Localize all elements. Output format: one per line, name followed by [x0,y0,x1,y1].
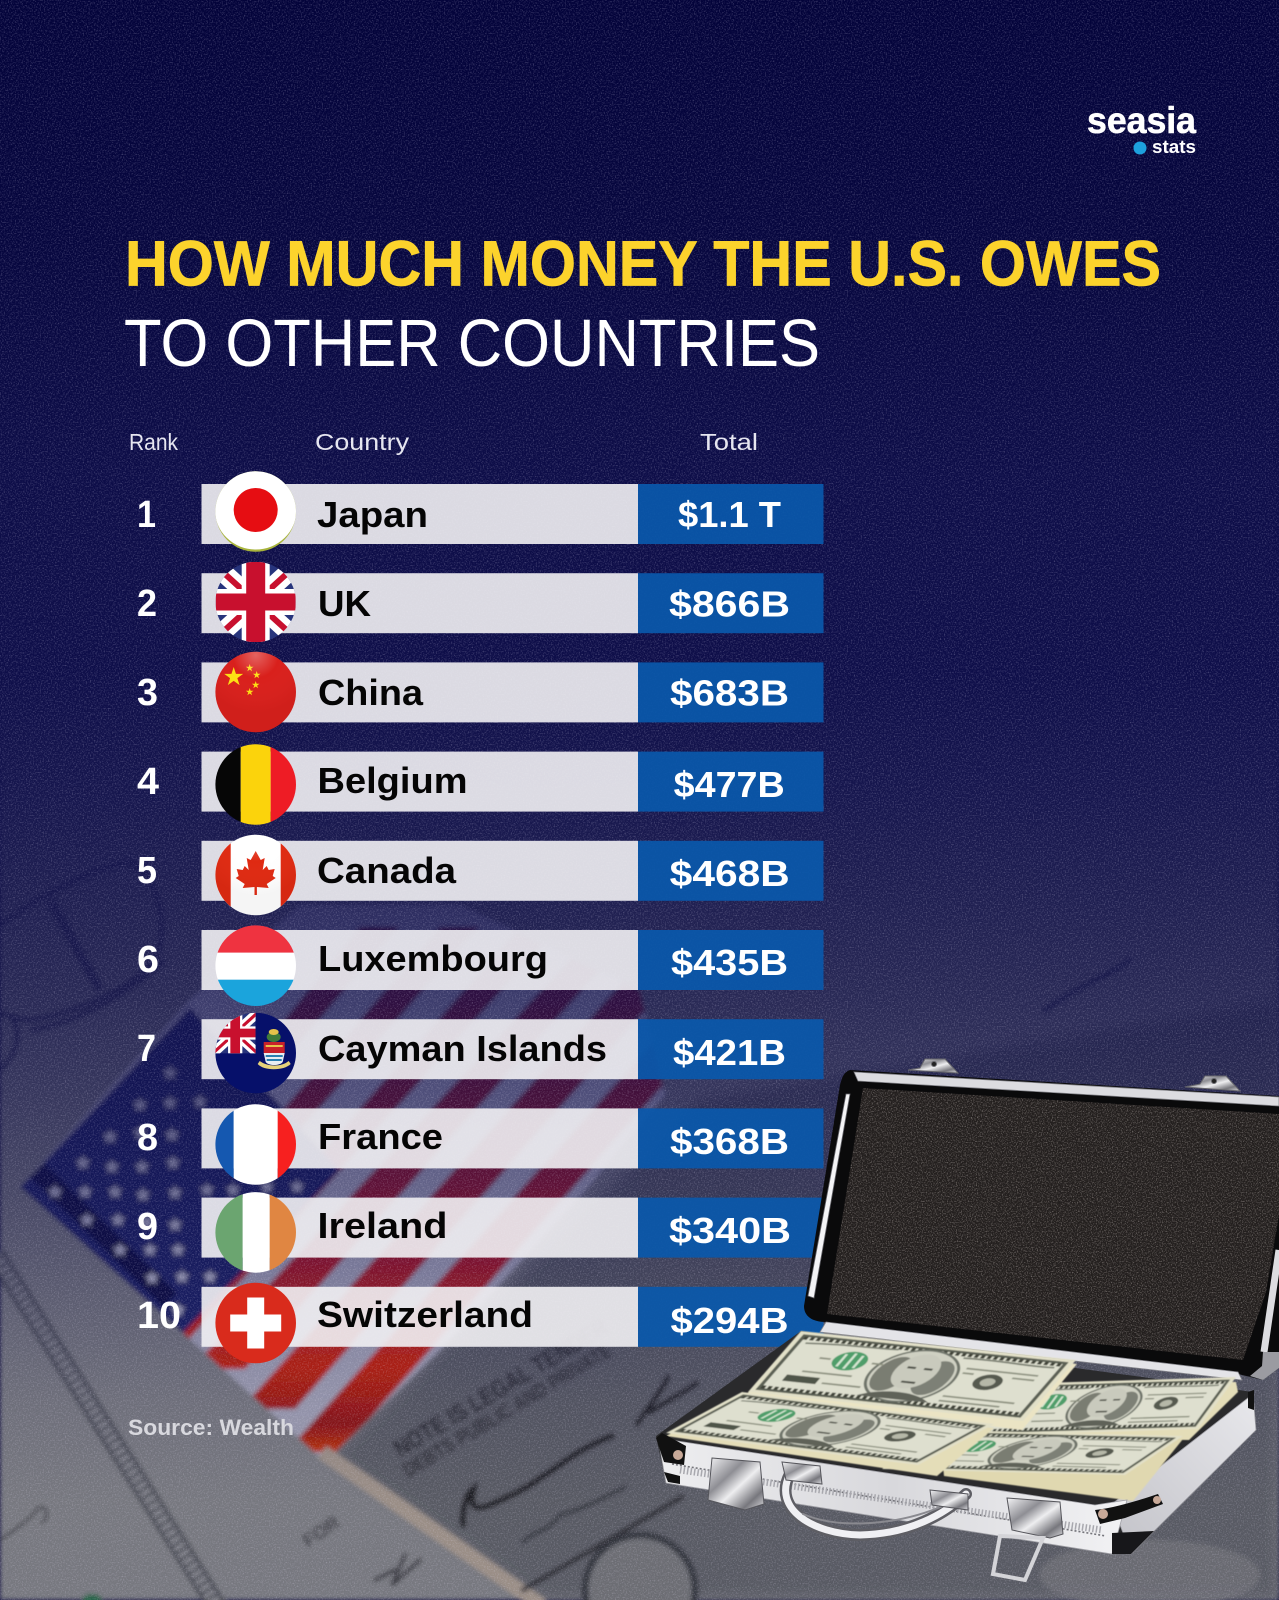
title [125,240,1159,366]
row 1: Japan: $1.1 T [678,494,781,535]
row 1: Japan [137,470,824,552]
signatures and seal [0,960,1130,1600]
row 7: Cayman Islands: Cayman Islands [318,1028,607,1069]
logo: seasia stats: stats [1152,137,1196,157]
row 8: France [137,1104,824,1186]
briefcase full of money [656,1059,1279,1580]
bill edge [322,1452,542,1600]
row 3: China: 3 [137,672,158,714]
row 4: Belgium: $477B [674,764,785,805]
ranking table [137,470,824,1364]
row 5: Canada [137,834,824,916]
row 8: France: 8 [137,1117,158,1159]
row 7: Cayman Islands: 7 [137,1028,156,1070]
row 4: Belgium: Belgium [318,760,468,801]
row 10: Switzerland: 10 [137,1295,181,1337]
row 1: Japan: 1 [137,494,156,536]
row 2: UK [137,562,824,642]
row 4: Belgium [137,744,824,826]
row 6: Luxembourg [137,925,824,1008]
row 5: Canada: Canada [317,850,457,891]
row 2: UK: $866B [669,584,790,625]
logo: seasia stats [1088,106,1196,154]
background photo: dollar bill and US flag [0,798,1279,1600]
row 2: UK: UK [318,583,371,624]
lid foam [827,1088,1279,1360]
row 9: Ireland: $340B [669,1210,791,1251]
banknote stacks [666,1331,1238,1501]
row 5: Canada: $468B [670,853,790,894]
source note: Source: Wealth [128,1415,294,1440]
row 3: China: China [318,672,424,713]
row 8: France: France [318,1116,443,1157]
case body [656,1331,1255,1554]
US flag [55,905,666,1457]
black corners [656,1433,686,1465]
row 9: Ireland: 9 [137,1206,158,1248]
row 7: Cayman Islands: $421B [673,1032,786,1073]
row 10: Switzerland: $294B [670,1300,788,1341]
row 10: Switzerland: Switzerland [317,1294,533,1335]
row 3: China [137,651,824,733]
upper note shapes [0,903,164,1070]
title: TO OTHER COUNTRIES [124,306,820,381]
row 8: France: $368B [670,1121,789,1162]
lower lid rim [820,1322,1242,1380]
row 9: Ireland: Ireland [318,1205,448,1246]
handle [786,1474,966,1535]
perforated ribbon on the bill [0,1254,222,1600]
flag canton with stars [20,1007,340,1333]
row 6: Luxembourg: $435B [671,942,788,983]
bill lettering: NOTE IS LEGAL TENDER [389,1313,613,1463]
row 10: Switzerland [137,1282,824,1364]
column headers: Total [700,429,758,455]
lid hinges and latches [908,1059,1240,1091]
row 6: Luxembourg: 6 [137,939,159,981]
row 9: Ireland [137,1191,824,1273]
column headers: Rank [129,429,178,455]
bill lettering: DEBTS PUBLIC AND PRIVATE [399,1339,616,1482]
row 4: Belgium: 4 [137,761,159,803]
logo: seasia stats: seasia [1087,100,1196,141]
row 2: UK: 2 [137,583,157,625]
row 7: Cayman Islands [137,1012,824,1094]
column headers: Country [315,429,410,455]
lid frame [804,1070,1279,1380]
latches [708,1458,1063,1580]
row 5: Canada: 5 [137,850,157,892]
row 3: China: $683B [670,673,789,714]
bill lettering [299,1313,616,1552]
column headers [130,433,756,455]
bill lettering: FOR [299,1512,344,1552]
title: HOW MUCH MONEY THE U.S. OWES [125,228,1161,300]
case front panel [658,1438,1127,1554]
row 1: Japan: Japan [317,494,428,535]
row 6: Luxembourg: Luxembourg [318,938,548,979]
